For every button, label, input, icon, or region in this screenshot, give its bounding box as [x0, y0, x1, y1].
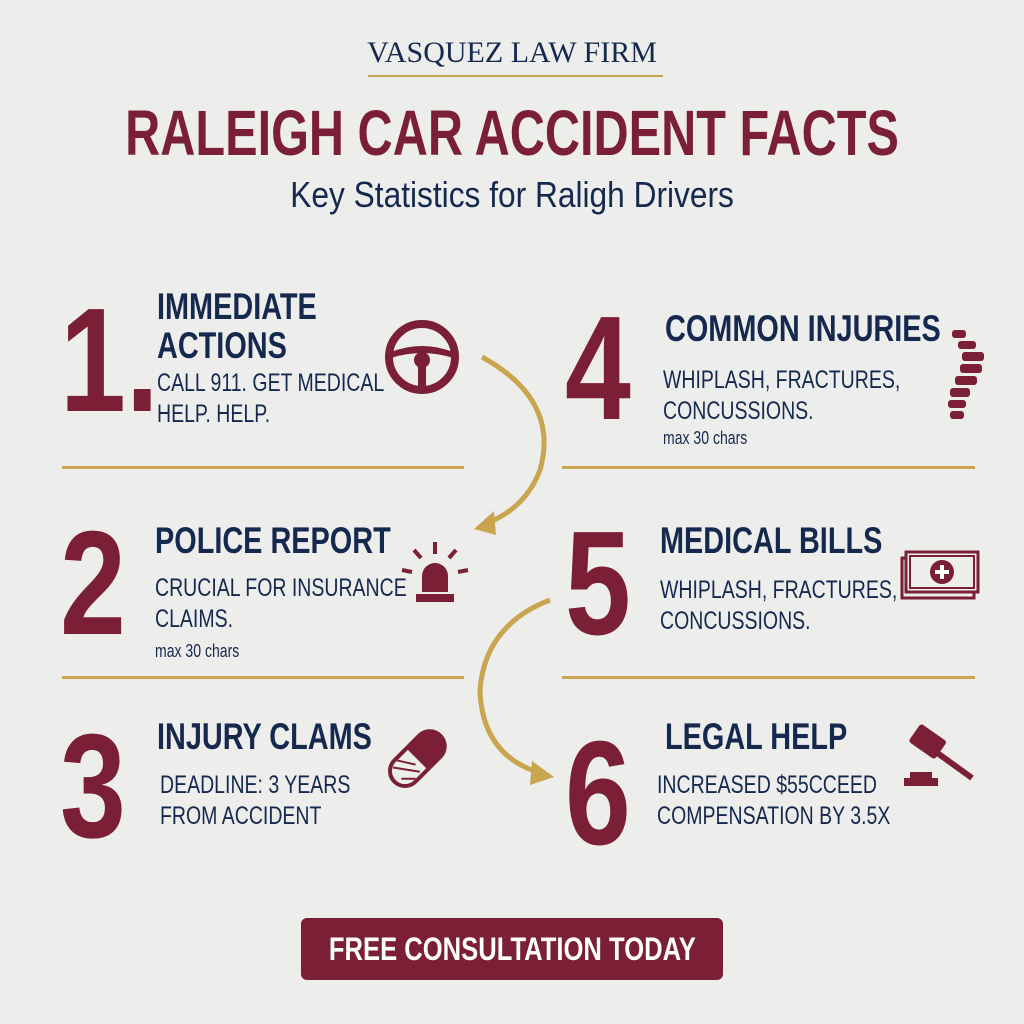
icon: money with cross: [900, 550, 980, 600]
icon: siren: [402, 542, 468, 602]
item 3: INJURY CLAMS: [157, 716, 372, 757]
item 2: max 30 chars: [155, 641, 239, 661]
item 4: WHIPLASH, FRACTURES,: [663, 366, 900, 394]
item 3: DEADLINE: 3 YEARS: [160, 771, 350, 799]
item 3: 3: [60, 704, 126, 869]
item 4: 4: [565, 286, 631, 451]
item 3: [60, 704, 372, 869]
item 1: CALL 911. GET MEDICAL: [157, 369, 384, 397]
icon: gavel: [904, 724, 974, 786]
item 6: COMPENSATION BY 3.5X: [657, 802, 890, 830]
title: RALEIGH CAR ACCIDENT FACTS: [125, 97, 899, 169]
item 2: 2: [60, 501, 126, 666]
item 1: [60, 278, 384, 443]
button: free consultation: FREE CONSULTATION TODAY: [329, 931, 695, 967]
item 1: IMMEDIATE: [157, 286, 317, 327]
arrow: 5 to 6: [478, 598, 554, 785]
icon: bandage: [388, 729, 447, 788]
firm underline: [368, 75, 663, 77]
item 5: WHIPLASH, FRACTURES,: [660, 576, 897, 604]
item 6: 6: [565, 711, 631, 876]
item 1: HELP. HELP.: [157, 400, 270, 428]
item 2: [60, 501, 407, 666]
item 2: CLAIMS.: [155, 605, 233, 633]
icon: steering wheel: [385, 320, 459, 394]
item 4: CONCUSSIONS.: [663, 397, 814, 425]
item 5: MEDICAL BILLS: [660, 520, 882, 561]
item 5: CONCUSSIONS.: [660, 607, 811, 635]
item 3: FROM ACCIDENT: [160, 802, 321, 830]
arrow: 1 to 2: [474, 354, 547, 535]
icon: spine: [948, 330, 984, 419]
item 1: 1.: [60, 278, 159, 443]
button: free consultation: [301, 918, 723, 980]
firm name: VASQUEZ LAW FIRM: [367, 36, 657, 69]
item 6: LEGAL HELP: [665, 716, 847, 757]
item 5: 5: [565, 501, 631, 666]
subtitle: Key Statistics for Raligh Drivers: [290, 174, 734, 215]
item 4: COMMON INJURIES: [665, 308, 941, 349]
item 2: CRUCIAL FOR INSURANCE: [155, 574, 407, 602]
item 6: INCREASED $55CCEED: [657, 771, 877, 799]
item 2: POLICE REPORT: [155, 520, 391, 561]
item 5: [565, 501, 897, 666]
item 4: max 30 chars: [663, 428, 747, 448]
item 6: [565, 711, 890, 876]
item 1: ACTIONS: [157, 325, 287, 366]
item 4: [565, 286, 941, 451]
